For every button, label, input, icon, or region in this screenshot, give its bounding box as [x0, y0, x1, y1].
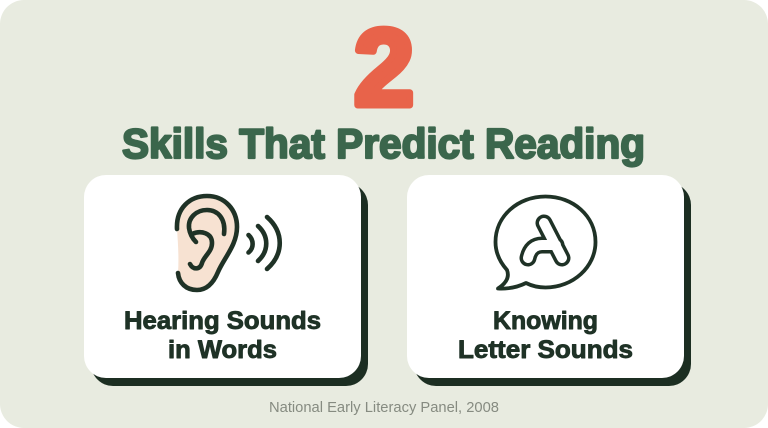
icon: speech bubble with letter A	[496, 196, 596, 289]
title: Skills That Predict Reading	[122, 120, 645, 167]
panel: hearing sounds	[84, 175, 368, 386]
label: hearing sounds in words	[124, 307, 321, 364]
label: hearing sounds in words: Hearing Sounds	[124, 307, 321, 335]
icon: ear with sound waves	[177, 196, 280, 290]
panel: letter sounds	[407, 175, 691, 386]
big number 2: 2	[354, 7, 414, 129]
label: knowing letter sounds	[458, 307, 633, 364]
source footer: National Early Literacy Panel, 2008	[269, 399, 499, 416]
label: knowing letter sounds: Knowing	[493, 307, 598, 335]
card	[84, 175, 361, 378]
card shadow	[414, 183, 691, 386]
label: hearing sounds in words: in Words	[168, 336, 277, 364]
card	[407, 175, 684, 378]
card shadow	[91, 183, 368, 386]
label: knowing letter sounds: Letter Sounds	[458, 336, 633, 364]
